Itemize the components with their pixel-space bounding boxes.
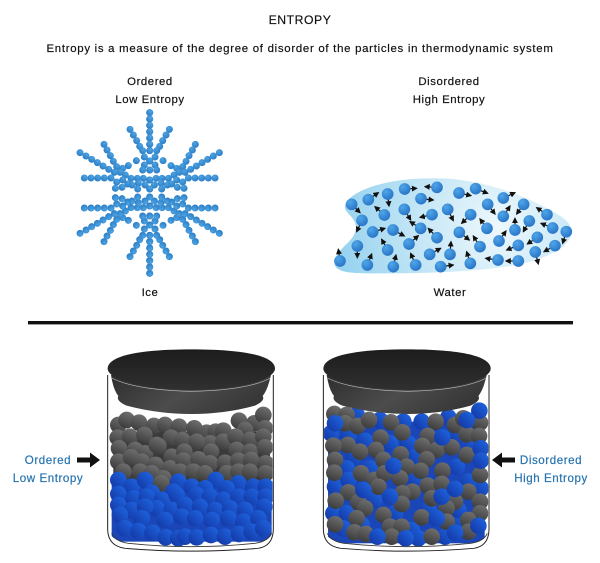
grey balls on top [109, 407, 274, 492]
blue balls on bottom [110, 472, 274, 547]
label: disordered high entropy [413, 76, 485, 106]
label: water: Water [434, 287, 466, 299]
title: ENTROPY [269, 13, 331, 27]
label: disordered high entropy: High Entropy [413, 94, 485, 106]
jar: disordered [323, 349, 491, 551]
label: ordered low entropy [115, 76, 185, 106]
label: disordered high entropy (blue): Disordered [520, 454, 582, 467]
label: ordered low entropy (blue): Low Entropy [13, 472, 83, 485]
label: ordered low entropy (blue) [13, 454, 83, 485]
water molecules [334, 181, 572, 272]
jar: ordered [108, 349, 275, 551]
arrow: left [492, 452, 515, 468]
water blob [334, 178, 572, 273]
snowflake ice particles [77, 109, 223, 277]
divider [28, 321, 573, 324]
subtitle: Entropy is a measure of the degree of disorder of the particles in thermodynamic system [46, 43, 554, 55]
arrow: right [77, 452, 100, 468]
arrows [338, 187, 566, 267]
label: disordered high entropy: Disordered [418, 76, 480, 88]
mixed balls [323, 402, 489, 547]
label: ordered low entropy: Low Entropy [115, 94, 185, 106]
label: disordered high entropy (blue): High Entropy [514, 472, 588, 485]
label: ice: Ice [142, 287, 158, 299]
label: ordered low entropy: Ordered [127, 76, 173, 88]
label: ordered low entropy (blue): Ordered [25, 454, 71, 467]
label: disordered high entropy (blue) [514, 454, 588, 485]
water particles with arrows [334, 178, 572, 273]
